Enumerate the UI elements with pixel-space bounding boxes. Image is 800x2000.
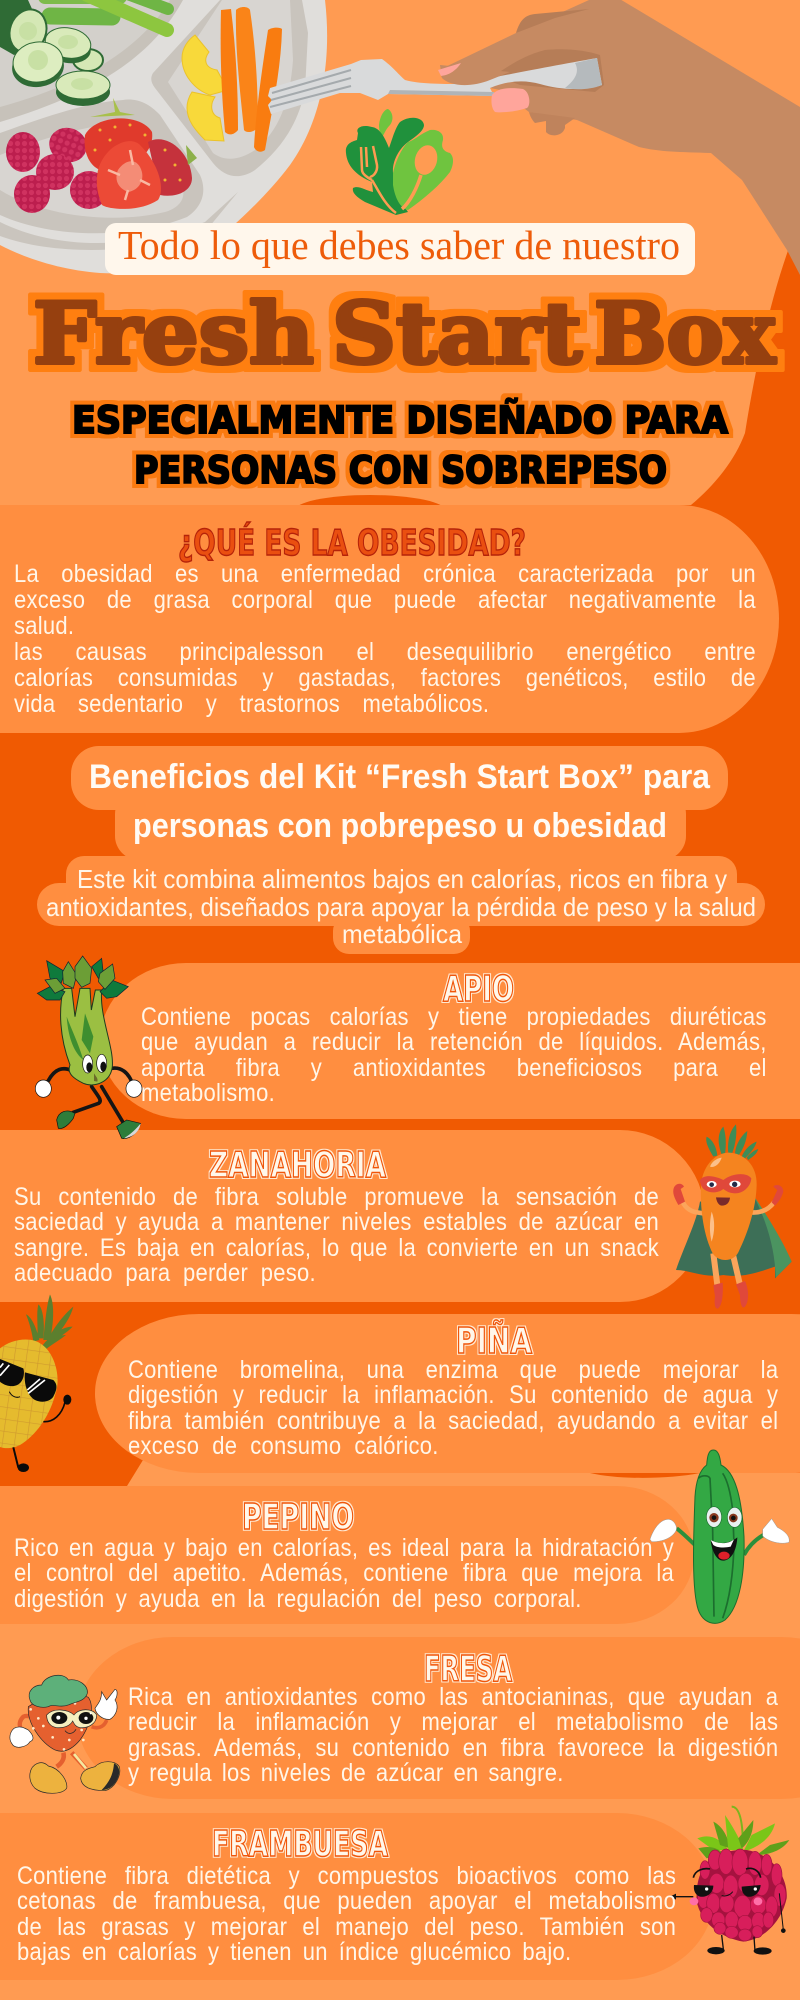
character: carrot xyxy=(673,1124,792,1309)
fruit headings xyxy=(209,969,532,1865)
text: frambuesa description xyxy=(17,1862,676,1966)
text: kit intro xyxy=(46,864,756,949)
panel: fresa xyxy=(77,1637,800,1799)
illustration: hand holding fork xyxy=(268,0,800,275)
celery sticks xyxy=(45,0,168,30)
text: fresa description: grasas. Además, su contenido en fibra favorece la digestión xyxy=(128,1734,778,1762)
text: apio description xyxy=(141,1003,767,1107)
subtitle xyxy=(72,398,728,492)
character: strawberry xyxy=(10,1675,120,1793)
text: frambuesa description: de las grasas y mejorar el manejo del peso. También son xyxy=(17,1913,676,1941)
panel: pepino xyxy=(0,1486,694,1624)
text: fresa description: y regula los niveles de azúcar en sangre. xyxy=(128,1759,564,1787)
character: celery xyxy=(35,956,142,1139)
text: kit intro: Este kit combina alimentos bajos en calorías, ricos en fibra y xyxy=(77,864,727,894)
text: pepino description xyxy=(14,1534,674,1613)
text: apio description: que ayudan a reducir la retención de líquidos. Además, xyxy=(141,1028,767,1056)
background shape: dark orange xyxy=(0,245,800,1486)
fork xyxy=(268,58,602,114)
logo: leaves with fork and spoon xyxy=(346,109,453,215)
panel: benefits title xyxy=(37,746,765,954)
heading: benefits: Beneficios del Kit “Fresh Start Box” para xyxy=(89,758,711,796)
text: obesity paragraph: La obesidad es una enfermedad crónica caracterizada por un xyxy=(14,560,756,588)
character: raspberry xyxy=(670,1807,789,1955)
tagline box: Todo lo que debes saber de nuestro xyxy=(118,222,680,268)
text: apio description: aporta fibra y antioxidantes beneficiosos para el xyxy=(141,1054,767,1082)
text: obesity paragraph: las causas principalesson el desequilibrio energético entre xyxy=(14,638,756,666)
text: piña description: fibra también contribuye a la saciedad, ayudando a evitar el xyxy=(128,1407,778,1435)
text: zanahoria description: Su contenido de fibra soluble promueve la sensación de xyxy=(14,1183,659,1211)
panel: apio xyxy=(100,963,800,1119)
text: kit intro: antioxidantes, diseñados para apoyar la pérdida de peso y la salud xyxy=(46,892,756,922)
fruit headings: PIÑA xyxy=(456,1320,532,1362)
heading: benefits xyxy=(89,758,711,845)
carrot sticks xyxy=(221,7,282,152)
text: piña description: digestión y reducir la inflamación. Su contenido de agua y xyxy=(128,1381,778,1409)
text: zanahoria description: sangre. Es baja en calorías, lo que la convierte en un snack xyxy=(14,1234,659,1262)
subtitle: ESPECIALMENTE DISEÑADO PARA xyxy=(72,398,728,442)
text: obesity paragraph xyxy=(14,560,756,718)
text: frambuesa description: cetonas de frambuesa, que pueden apoyar el metabolismo xyxy=(17,1887,676,1915)
cucumber slices xyxy=(0,0,110,106)
subtitle: PERSONAS CON SOBREPESO xyxy=(134,449,667,492)
text: zanahoria description: saciedad y ayuda a mantener niveles estables de azúcar en xyxy=(14,1208,659,1236)
text: pepino description: Rico en agua y bajo en calorías, es ideal para la hidratación y xyxy=(14,1534,674,1562)
text: frambuesa description: bajas en calorías y tienen un índice glucémico bajo. xyxy=(17,1938,571,1966)
heading: obesity: ¿QUÉ ES LA OBESIDAD? xyxy=(178,522,526,564)
panel: obesity xyxy=(0,505,779,733)
text: kit intro: metabólica xyxy=(342,919,463,949)
panel: frambuesa xyxy=(0,1813,714,1980)
text: obesity paragraph: vida sedentario y trastornos metabólicos. xyxy=(14,690,489,718)
fruit headings: FRAMBUESA xyxy=(212,1824,388,1865)
strawberries xyxy=(85,98,197,209)
text: piña description: exceso de consumo calórico. xyxy=(128,1432,439,1460)
text: obesity paragraph: calorías consumidas y gastadas, factores genéticos, estilo de xyxy=(14,664,756,692)
title: Fresh Start Box xyxy=(33,284,776,383)
text: piña description: Contiene bromelina, una enzima que puede mejorar la xyxy=(128,1356,778,1384)
decorative bump above obesity panel xyxy=(294,495,446,527)
title: Fresh Start Box: Box xyxy=(594,284,776,383)
text: piña description xyxy=(128,1356,778,1460)
character: pineapple xyxy=(0,1294,73,1472)
text: zanahoria description xyxy=(14,1183,659,1287)
text: frambuesa description: Contiene fibra dietética y compuestos bioactivos como las xyxy=(17,1862,676,1890)
panel: zanahoria xyxy=(0,1130,705,1302)
heading: benefits: personas con pobrepeso u obesidad xyxy=(133,807,667,845)
text: pepino description: digestión y ayuda en la regulación del peso corporal. xyxy=(14,1585,582,1613)
text: pepino description: el control del apetito. Además, contiene fibra que mejora la xyxy=(14,1559,674,1587)
fruit headings: ZANAHORIA xyxy=(209,1145,386,1186)
title: Fresh Start Box: Start xyxy=(332,284,582,383)
illustration: plate with vegetables and fruit xyxy=(0,0,327,273)
text: zanahoria description: adecuado para perder peso. xyxy=(14,1259,316,1287)
text: fresa description xyxy=(128,1683,778,1787)
text: fresa description: reducir la inflamación y mejorar el metabolismo de las xyxy=(128,1708,778,1736)
text: fresa description: Rica en antioxidantes como las antocianinas, que ayudan a xyxy=(128,1683,778,1711)
text: apio description: metabolismo. xyxy=(141,1079,275,1107)
panel: piña xyxy=(95,1314,800,1473)
text: obesity paragraph: salud. xyxy=(14,612,74,640)
text: obesity paragraph: exceso de grasa corporal que puede afectar negativamente la xyxy=(14,586,756,614)
title: Fresh Start Box: Fresh xyxy=(33,284,314,383)
raspberries xyxy=(6,123,108,213)
text: apio description: Contiene pocas calorías y tiene propiedades diuréticas xyxy=(141,1003,767,1031)
pineapple pieces xyxy=(182,35,228,141)
fruit headings: APIO xyxy=(443,969,514,1010)
character: cucumber xyxy=(650,1450,789,1623)
fruit headings: PEPINO xyxy=(242,1497,354,1538)
fruit headings: FRESA xyxy=(424,1649,512,1690)
